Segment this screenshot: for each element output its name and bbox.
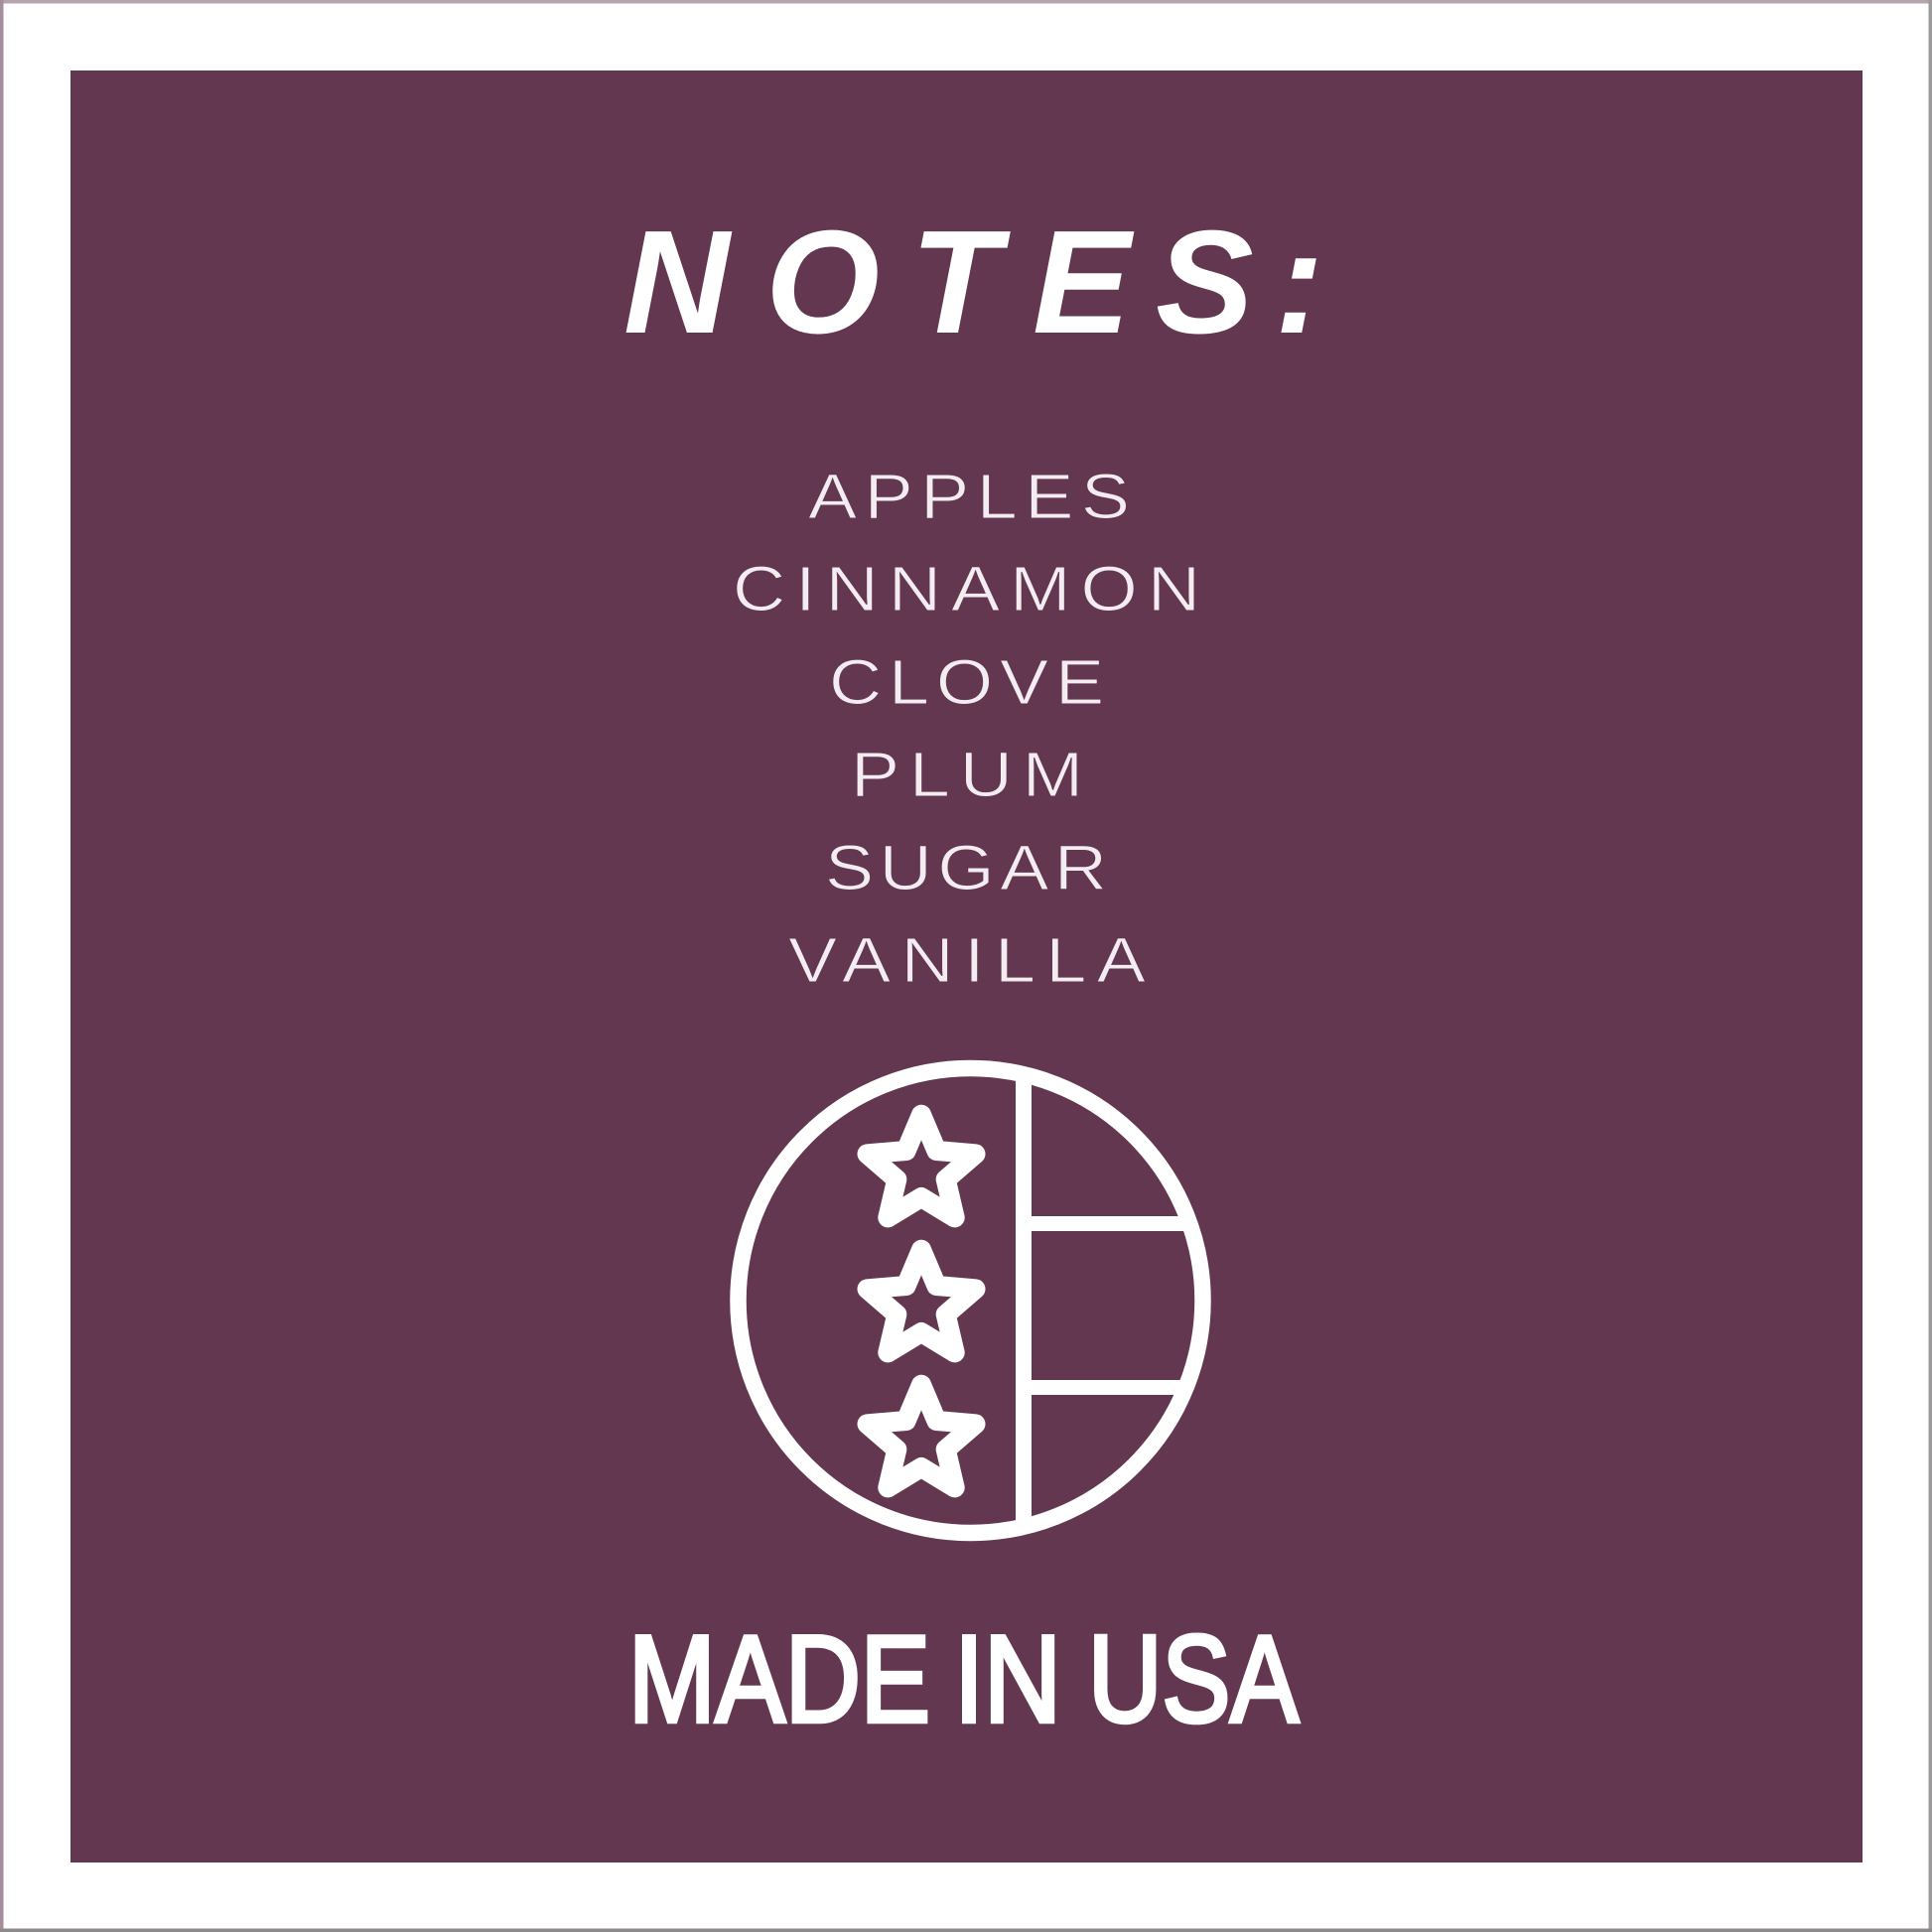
list of notes (733, 461, 1200, 996)
list of notes: CINNAMON (733, 553, 1200, 624)
list of notes: APPLES (808, 461, 1130, 532)
list of notes: VANILLA (788, 924, 1146, 996)
label: made in usa: MADE (628, 1611, 930, 1748)
label: made in usa: USA (1088, 1611, 1299, 1748)
list of notes: SUGAR (825, 832, 1107, 903)
label: made in usa: IN (954, 1611, 1061, 1748)
list of notes: PLUM (851, 739, 1083, 810)
icon: made in usa flag circle (739, 1068, 1203, 1533)
list of notes: CLOVE (829, 646, 1104, 718)
heading: notes: NOTES: (623, 201, 1323, 364)
label: made in usa (628, 1611, 1299, 1748)
